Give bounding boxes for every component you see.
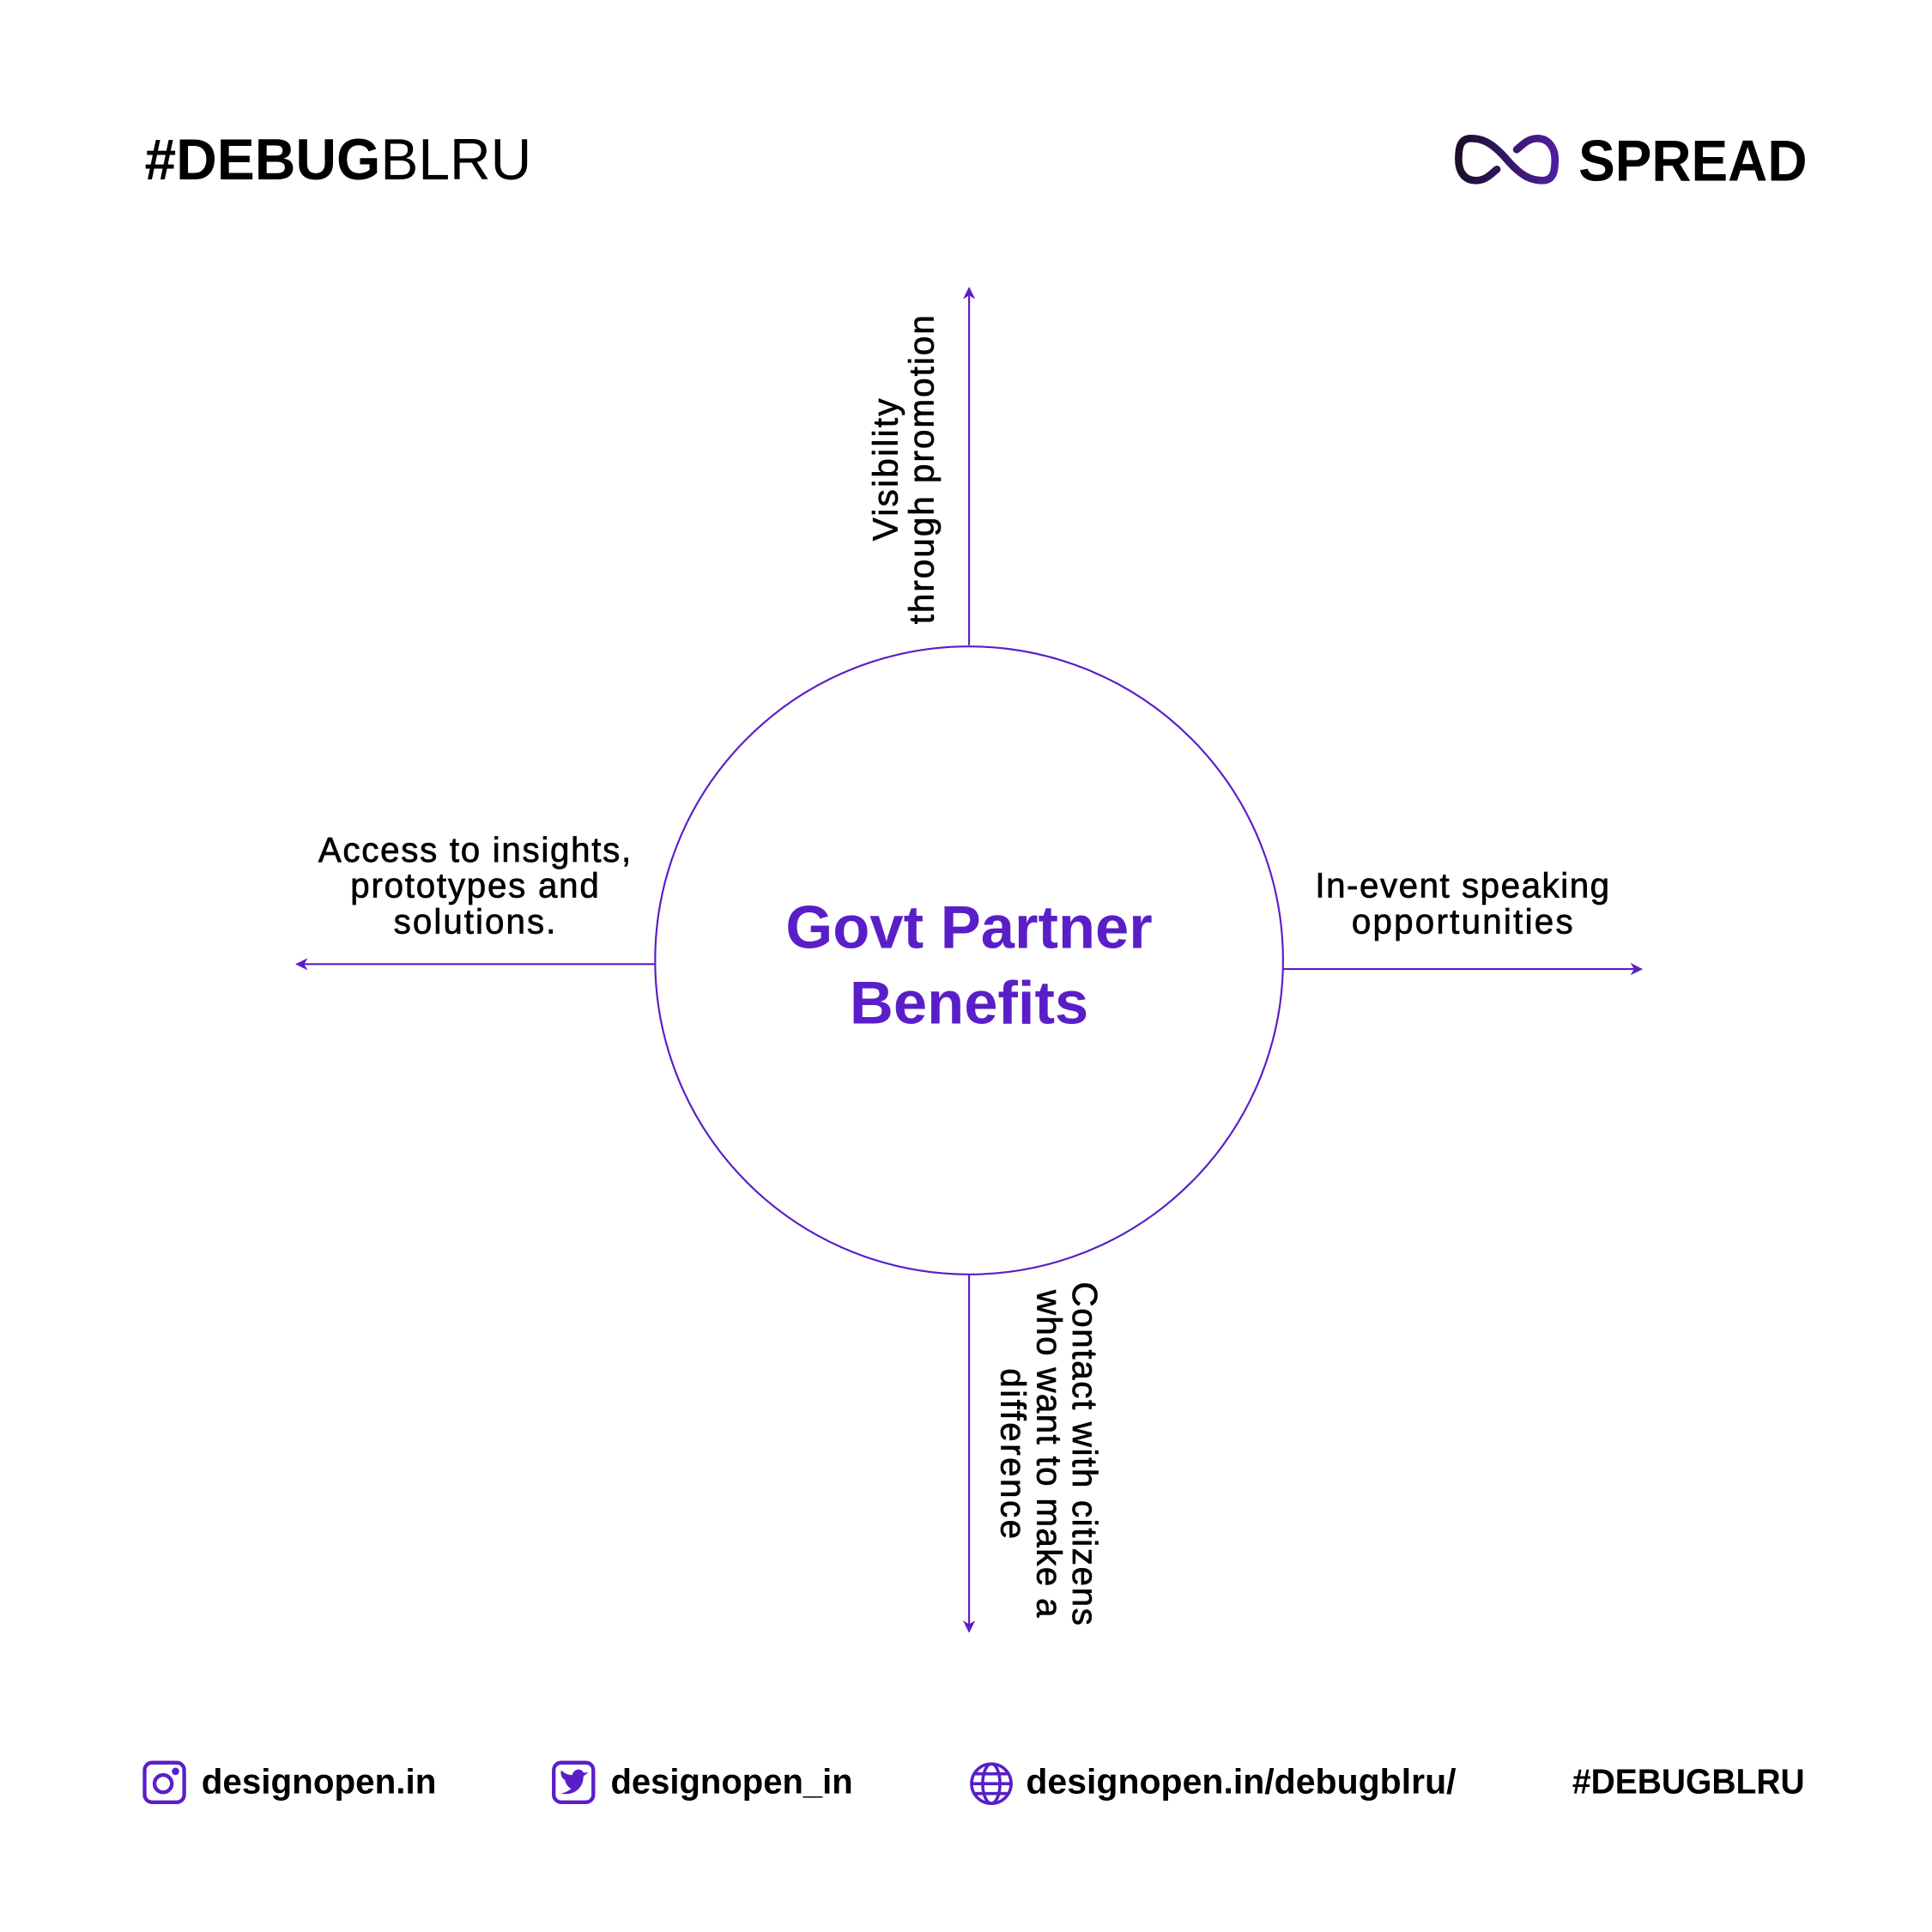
text: left benefit: Access to insights, xyxy=(318,830,631,869)
logo: spread xyxy=(1458,129,1808,193)
text: left benefit: solutions. xyxy=(394,901,555,941)
center circle xyxy=(655,646,1283,1275)
icon: globe xyxy=(972,1764,1011,1803)
header: debugblru logo: #DEBUGBLRU xyxy=(145,128,531,192)
arrow: right xyxy=(1283,968,1642,970)
text: bottom benefit: who want to make a xyxy=(1029,1289,1069,1618)
text: bottom benefit: difference xyxy=(994,1368,1033,1539)
icon: instagram xyxy=(145,1763,185,1802)
title: Benefits xyxy=(850,968,1088,1036)
text: left benefit: prototypes and xyxy=(350,866,599,905)
text: top benefit: Visibility xyxy=(866,398,905,541)
text: right benefit: opportunities xyxy=(1352,901,1573,941)
text: right benefit: In-event speaking xyxy=(1315,866,1609,905)
footer xyxy=(145,1762,1805,1803)
text: top benefit: through promotion xyxy=(901,315,941,624)
text: bottom benefit: Contact with citizens xyxy=(1065,1281,1105,1626)
footer: designopen.in xyxy=(202,1762,436,1802)
icon: twitter xyxy=(554,1763,593,1802)
icon: infinity xyxy=(1458,138,1555,180)
arrow: top xyxy=(968,288,970,645)
title: Govt Partner xyxy=(785,893,1153,961)
footer: designopen_in xyxy=(610,1762,853,1802)
arrow: left xyxy=(297,963,655,965)
arrow: bottom xyxy=(968,1275,970,1632)
footer: designopen.in/debugblru/ xyxy=(1026,1762,1457,1802)
logo: spread: SPREAD xyxy=(1578,129,1808,193)
footer hashtag: #DEBUGBLRU xyxy=(1572,1762,1805,1802)
